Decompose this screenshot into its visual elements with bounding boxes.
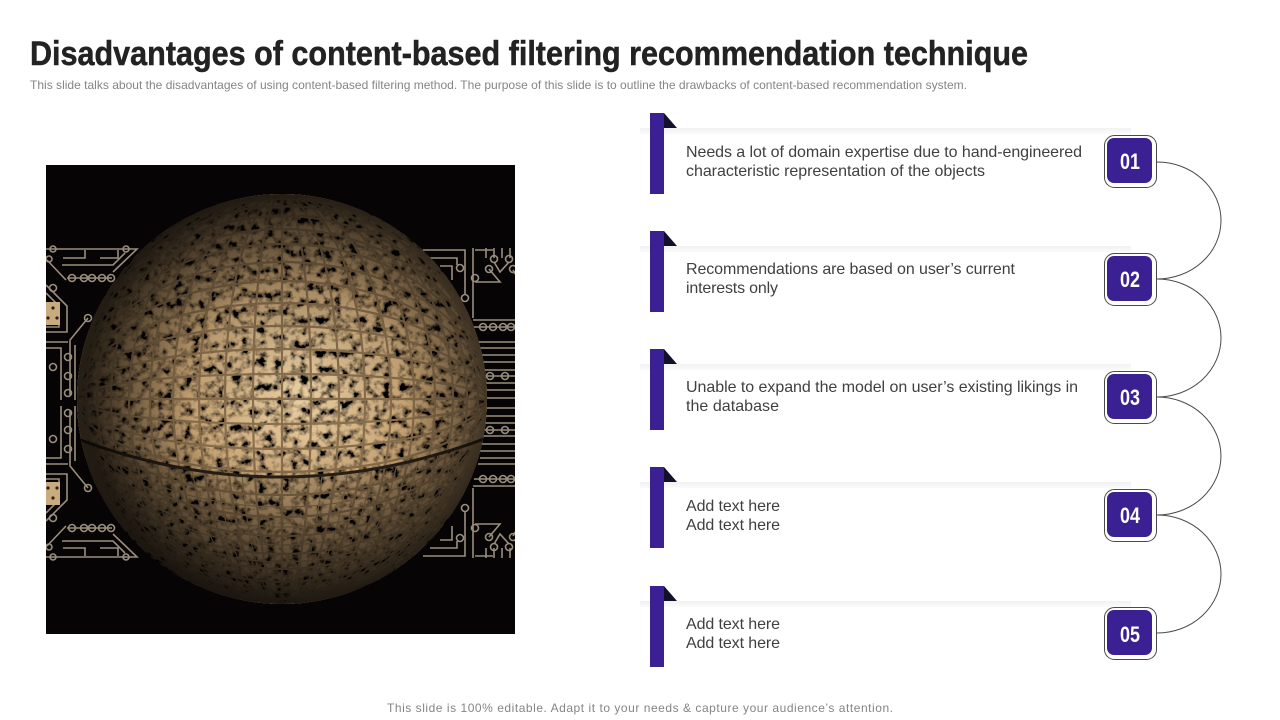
image: sphere of faces over circuit board — [46, 165, 520, 634]
item 1 bar — [650, 113, 664, 194]
badge 01 — [1104, 136, 1156, 188]
item 1 text — [686, 144, 1082, 180]
lower finer mesh — [88, 442, 482, 604]
item 1 fold — [664, 113, 677, 128]
item 4 band — [640, 482, 1131, 488]
badge 05 — [1104, 608, 1156, 660]
item 1 — [640, 113, 1131, 194]
item 1 band — [640, 128, 1131, 134]
item 1 text: Needs a lot of domain expertise due to hand-engineered — [686, 144, 1082, 161]
item 1 text: characteristic representation of the objects — [686, 163, 985, 180]
connector arcs — [1157, 162, 1221, 633]
footer note: This slide is 100% editable. Adapt it to your needs & capture your audience’s attention. — [387, 701, 893, 715]
circuit traces — [46, 246, 520, 560]
title: Disadvantages of content-based filtering recommendation technique — [30, 35, 1028, 73]
badge 04: 04 — [1120, 503, 1141, 528]
item 5 — [640, 586, 1131, 667]
item 4 fold — [664, 467, 677, 482]
circuit chips — [46, 302, 60, 505]
mesh latitude — [76, 199, 488, 599]
item 2 fold — [664, 231, 677, 246]
item 5 band — [640, 601, 1131, 607]
item 5 text — [686, 616, 780, 652]
item 4 text: Add text here — [686, 498, 780, 515]
item 4 — [640, 467, 1131, 548]
sphere shading — [70, 190, 495, 610]
badge 04 — [1104, 490, 1156, 542]
item 4 text: Add text here — [686, 517, 780, 534]
item 2 text — [686, 261, 1016, 297]
badge 01: 01 — [1120, 149, 1140, 174]
item 3 text: the database — [686, 398, 779, 415]
mesh longitude — [86, 194, 478, 604]
badge 03: 03 — [1120, 385, 1140, 410]
item 3 text — [686, 379, 1078, 415]
item 2 text: interests only — [686, 280, 778, 297]
badge 02 — [1104, 254, 1156, 306]
item 2 text: Recommendations are based on user’s current — [686, 261, 1016, 278]
sphere — [70, 190, 495, 620]
badge 03 — [1104, 372, 1156, 424]
badge 05: 05 — [1120, 622, 1140, 647]
item 5 text: Add text here — [686, 616, 780, 633]
badge 02: 02 — [1120, 267, 1140, 292]
item 4 text — [686, 498, 780, 534]
item 3 text: Unable to expand the model on user’s existing likings in — [686, 379, 1078, 396]
subtitle: This slide talks about the disadvantages of using content-based filtering method. The purpose of this slide is to outline the drawbacks of content-based recommendation system. — [30, 78, 967, 92]
item 3 fold — [664, 349, 677, 364]
item 3 band — [640, 364, 1131, 370]
item 2 bar — [650, 231, 664, 312]
item 3 bar — [650, 349, 664, 430]
sphere band — [70, 436, 492, 477]
item 2 band — [640, 246, 1131, 252]
item 2 — [640, 231, 1131, 312]
item 5 fold — [664, 586, 677, 601]
item 5 text: Add text here — [686, 635, 780, 652]
item 5 bar — [650, 586, 664, 667]
item 4 bar — [650, 467, 664, 548]
item 3 — [640, 349, 1131, 430]
